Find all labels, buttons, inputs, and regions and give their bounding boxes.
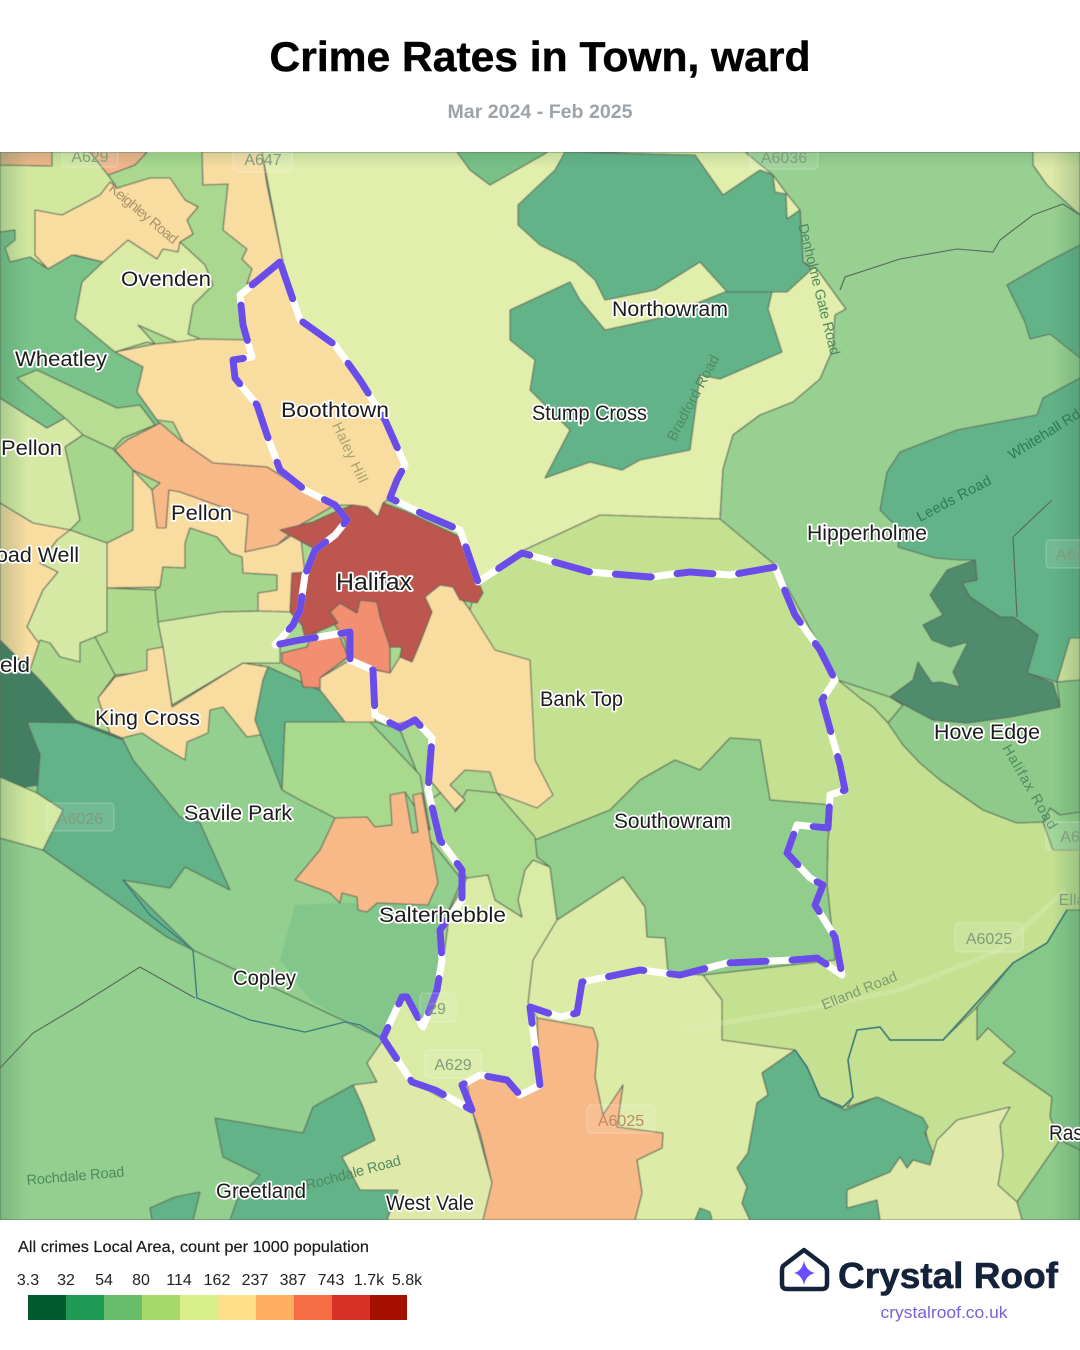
subtitle: date range: Mar 2024 - Feb 2025 xyxy=(448,102,633,123)
legend tick labels: 114 xyxy=(166,1272,192,1289)
region: King Cross green xyxy=(255,667,345,790)
legend tick labels: 3.3 xyxy=(17,1272,39,1289)
place labels: Salterhebble xyxy=(379,904,506,927)
legend tick labels: 743 xyxy=(318,1272,344,1289)
region: Stump Cross xyxy=(510,282,782,478)
region: south orange xyxy=(467,1018,663,1220)
region: centre pale xyxy=(158,611,300,705)
road labels: Elland Road xyxy=(820,969,900,1014)
boundary lines: ward edges and river xyxy=(0,204,1080,1107)
region: Southowram xyxy=(535,738,835,975)
region: Pellon orange xyxy=(115,423,335,552)
region: top left orange xyxy=(0,152,52,166)
region: Halifax salmon west xyxy=(282,633,348,688)
road number badges: A6026 xyxy=(57,811,103,828)
region: north-east dark edge xyxy=(1007,245,1080,358)
place labels: Pellon xyxy=(171,502,232,525)
legend tick labels: 32 xyxy=(57,1272,75,1289)
road number badges: A629 xyxy=(434,1057,472,1074)
road number badges: A629 xyxy=(71,149,109,166)
place labels: Halifax xyxy=(336,569,412,596)
region: east lower band xyxy=(888,680,1080,823)
region: south of river light green xyxy=(847,1007,1060,1202)
website url: crystalroof.co.uk xyxy=(880,1303,1008,1322)
region: west lower green xyxy=(30,637,115,733)
icon: house with star xyxy=(782,1250,827,1289)
legend xyxy=(17,1239,423,1320)
road number badges: A647 xyxy=(244,152,282,169)
region: centre south cream xyxy=(375,585,553,810)
legend tick labels: 5.8k xyxy=(392,1272,423,1289)
region: Savile Park xyxy=(122,665,462,1040)
region: Salterhebble orange xyxy=(295,792,438,912)
place labels: Hipperholme xyxy=(807,522,927,545)
region: Bank Top and east light green xyxy=(470,515,1080,1107)
road labels: Rochdale Road xyxy=(304,1153,403,1194)
region: south west hills and Savile Park xyxy=(0,838,398,1220)
legend colour scale xyxy=(28,1295,407,1320)
road labels: Denholme Gate Road xyxy=(794,222,842,357)
region: Boothtown cream xyxy=(115,262,405,517)
region: Greetland xyxy=(215,1085,398,1220)
region: Pellon cream xyxy=(107,470,305,612)
logo: Crystal Roof xyxy=(782,1250,1059,1322)
legend tick labels: 237 xyxy=(242,1272,268,1289)
road labels: Haley Hill xyxy=(328,420,370,486)
region: Wheatley dark band xyxy=(0,230,170,440)
region: far west darkest xyxy=(0,640,133,790)
place labels: Ovenden xyxy=(121,268,211,291)
legend tick labels: 387 xyxy=(280,1272,306,1289)
region: central south pale xyxy=(385,860,557,1110)
road number badges: 29 xyxy=(428,1001,446,1018)
region: bottom right pale xyxy=(847,1107,1022,1220)
choropleth map xyxy=(0,140,1080,1220)
place labels: Southowram xyxy=(614,810,731,833)
region: Ovenden pale xyxy=(75,240,213,352)
region: Hove Edge darkest xyxy=(890,560,1060,723)
title: Crime Rates in Town, ward xyxy=(270,33,810,80)
railway: pale valley bands xyxy=(680,890,1065,1030)
region: Bradford Well cream xyxy=(0,503,70,670)
region: West Vale pale xyxy=(342,1040,492,1220)
region: Ovenden cream xyxy=(35,178,198,269)
road number badges: A6025 xyxy=(598,1113,644,1130)
region: A629 orange xyxy=(90,152,147,175)
region: south of centre green xyxy=(282,722,430,830)
wordmark: Crystal Roof xyxy=(838,1255,1059,1296)
region: north notch xyxy=(457,152,548,185)
road number badges: A6 xyxy=(1060,829,1080,846)
place labels: West Vale xyxy=(386,1192,474,1215)
region: south dark green xyxy=(737,1050,933,1220)
region: small Greetland west xyxy=(150,1192,200,1220)
map edge shading xyxy=(0,152,1080,1220)
road labels: Leeds Road xyxy=(914,473,994,526)
region: top left pale xyxy=(0,152,117,269)
region: west pale xyxy=(0,777,63,850)
region: Savile left xyxy=(26,786,37,792)
place labels: Copley xyxy=(233,967,296,990)
region: Pellon pale xyxy=(0,398,83,530)
region: valley green east of boundary xyxy=(430,790,550,917)
place labels: Hove Edge xyxy=(934,721,1040,744)
region: A6 corner xyxy=(1043,808,1080,850)
place labels: King Cross xyxy=(95,707,200,730)
place labels: Pellon xyxy=(1,437,62,460)
region: north east corner pale xyxy=(1033,152,1080,215)
region: centre west green xyxy=(155,528,277,622)
road labels: Halifax Road xyxy=(999,742,1060,832)
region: north cream strip xyxy=(202,152,283,284)
road number badges: A6025 xyxy=(966,931,1012,948)
region: bottom small green xyxy=(695,1208,712,1220)
place labels: Wheatley xyxy=(15,348,108,371)
legend tick labels: 80 xyxy=(132,1272,150,1289)
road number badges: A6036 xyxy=(761,150,807,167)
legend tick labels: 54 xyxy=(95,1272,113,1289)
region: Halifax centre dark red xyxy=(280,503,483,662)
place labels: Greetland xyxy=(216,1180,306,1203)
place labels: eld xyxy=(0,654,30,677)
region: Salterhebble woodland xyxy=(280,903,440,1040)
region: Wheatley pale xyxy=(17,370,155,449)
legend tick labels: 162 xyxy=(204,1272,230,1289)
region: west mid green xyxy=(95,588,163,675)
road number badges xyxy=(46,140,1080,1133)
region: Savile cream xyxy=(320,660,375,722)
road labels: Keighley Road xyxy=(105,181,181,248)
place labels: Northowram xyxy=(612,298,728,321)
region: Northowram upper xyxy=(518,152,812,300)
region: west pale block xyxy=(27,530,107,662)
region: east dark green xyxy=(880,378,1080,682)
road labels xyxy=(26,181,1080,1194)
legend title: All crimes Local Area, count per 1000 population xyxy=(18,1239,369,1256)
place labels: Stump Cross xyxy=(532,402,647,425)
legend tick labels: 1.7k xyxy=(354,1272,385,1289)
region: Pellon green xyxy=(65,435,133,543)
region: pale east sliver xyxy=(1057,638,1080,682)
road labels: Rochdale Road xyxy=(26,1165,125,1189)
region: south pale xyxy=(528,877,795,1220)
region: pale north centre xyxy=(262,152,846,582)
region: Halifax salmon east xyxy=(330,600,390,673)
place labels: Savile Park xyxy=(184,802,292,825)
region: King Cross cream xyxy=(98,647,288,760)
region: A6026 dark wood xyxy=(27,722,230,950)
place labels: Bank Top xyxy=(540,688,623,711)
place labels xyxy=(0,268,1080,1215)
region: north east green xyxy=(720,152,1080,707)
legend tick labels xyxy=(17,1272,423,1289)
ward boundary: white and purple dashed line xyxy=(233,262,845,1110)
region: east of river green xyxy=(977,910,1080,1150)
place labels: Boothtown xyxy=(281,399,389,422)
road labels: Bradford Road xyxy=(664,352,723,444)
region: bottom right corner green xyxy=(1017,1140,1080,1220)
